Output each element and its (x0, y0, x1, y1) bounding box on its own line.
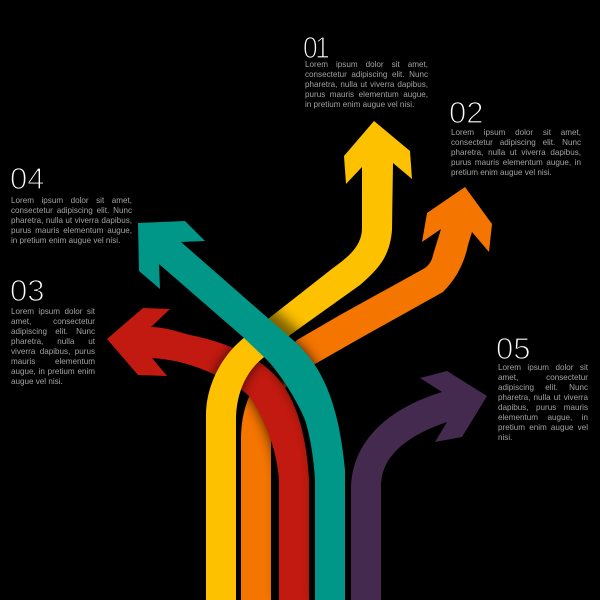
text block 03: mauris elementum (11, 357, 95, 366)
text block 01: purus mauris elementum augue, (305, 90, 428, 99)
text block 05: dapibus, purus mauris (498, 403, 588, 412)
text block 02: pharetra, nulla ut viverra dapibus, (451, 148, 581, 157)
text block 03: adipiscing elit. Nunc (11, 327, 95, 336)
number 04: 04 (10, 161, 44, 196)
text block 03: viverra dapibus, purus (11, 347, 95, 356)
arrow 01: yellow (206, 121, 412, 600)
number 02: 02 (449, 95, 483, 130)
number 03: 03 (10, 273, 44, 308)
number 05: 05 (496, 331, 530, 366)
text block 01: consectetur adipiscing elit. Nunc (305, 70, 428, 79)
text block 01: Lorem ipsum dolor sit amet, (305, 60, 428, 69)
text block 04: purus mauris elementum augue, (11, 226, 132, 235)
text block 05: pharetra, nulla ut viverra (498, 393, 588, 402)
number 01: 01 (303, 30, 327, 65)
text block 04 (11, 196, 132, 245)
text block 04: pharetra, nulla ut viverra dapibus, (11, 216, 132, 225)
text block 03: augue vel nisi. (11, 377, 63, 386)
text block 01 (305, 60, 428, 109)
text block 02: Lorem ipsum dolor sit amet, (451, 128, 581, 137)
text block 01: pharetra, nulla ut viverra dapibus, (305, 80, 428, 89)
text block 04: Lorem ipsum dolor sit amet, (11, 196, 132, 205)
text block 02 (451, 128, 581, 177)
text block 03: augue, in pretium enim (11, 367, 95, 376)
text block 05: adipiscing elit. Nunc (498, 383, 588, 392)
text block 05: amet, consectetur (498, 373, 588, 382)
text block 05: elementum augue, in (498, 413, 588, 422)
arrow 02: orange (241, 187, 492, 600)
text block 01: in pretium enim augue vel nisi. (305, 100, 414, 109)
text block 03 (11, 307, 95, 386)
text block 04: consectetur adipiscing elit. Nunc (11, 206, 132, 215)
text block 05: nisi. (498, 433, 512, 442)
text block 05: Lorem ipsum dolor sit (498, 363, 588, 372)
text block 02: purus mauris elementum augue, in (451, 158, 581, 167)
text block 03: amet, consectetur (11, 317, 95, 326)
arrow 05: purple (351, 371, 487, 600)
text block 02: consectetur adipiscing elit. Nunc (451, 138, 581, 147)
text block 05 (498, 363, 588, 442)
text block 03: Lorem ipsum dolor sit (11, 307, 95, 316)
text block 03: pharetra, nulla ut (11, 337, 95, 346)
text block 04: in pretium enim augue vel nisi. (11, 236, 120, 245)
arrow 04: teal (138, 221, 345, 600)
text block 02: pretium enim augue vel nisi. (451, 168, 552, 177)
text block 05: pretium enim augue vel (498, 423, 588, 432)
arrow 03: red (107, 308, 309, 600)
